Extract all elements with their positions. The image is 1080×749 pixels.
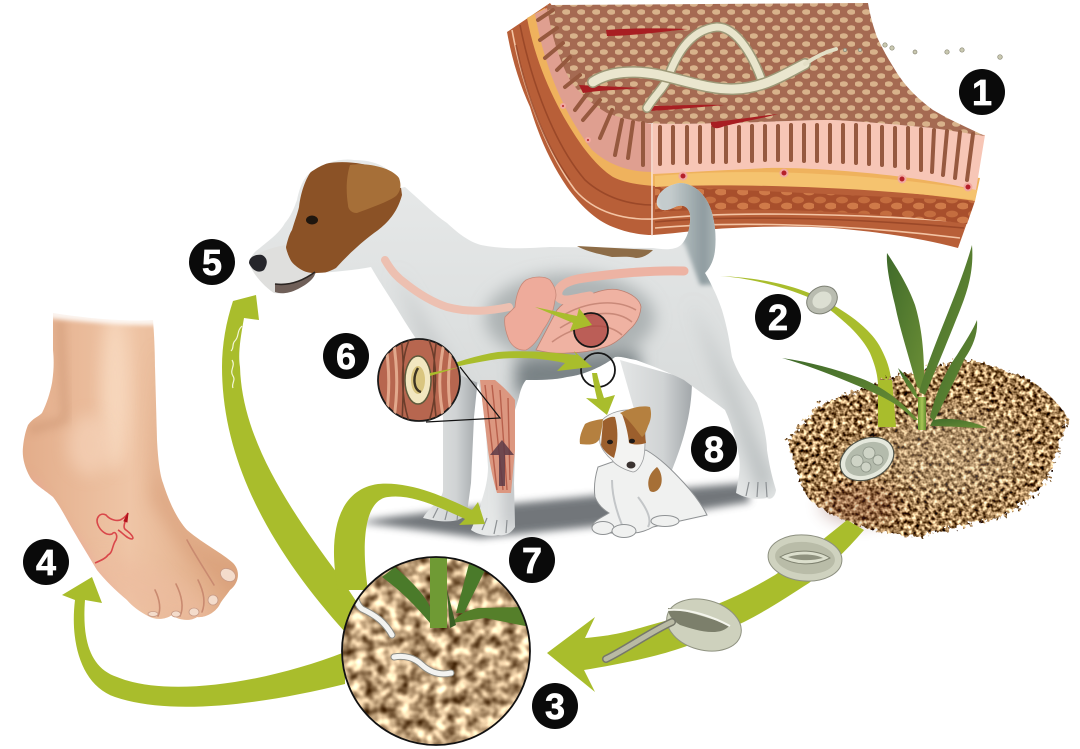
larva cyst <box>405 356 431 404</box>
bleeding spots <box>579 28 778 128</box>
badge 1: 1 <box>972 72 992 113</box>
toenails <box>148 566 238 617</box>
puppy body <box>592 450 707 533</box>
muscle circle <box>378 339 460 421</box>
head brown patch <box>286 162 402 273</box>
orange sub-layer <box>527 8 980 201</box>
larvae on arrow <box>231 326 242 388</box>
blood vessels <box>561 104 972 190</box>
icon: larva in egg <box>766 532 844 584</box>
stomach <box>505 277 556 350</box>
callout lines <box>426 367 500 422</box>
icon: egg in soil <box>833 429 901 489</box>
arrow: mammary to puppy <box>586 373 615 415</box>
section seam <box>651 124 653 236</box>
arrow: soil to step 3 <box>547 520 864 692</box>
lumen lining with cells <box>547 3 985 136</box>
badge 7: 7 <box>522 540 542 581</box>
inner arrow to intestine <box>535 307 592 331</box>
badge 7 <box>509 537 555 583</box>
arrow: step 3 to 4 <box>62 577 345 707</box>
ground shadow below dog <box>357 483 750 538</box>
mouth <box>275 272 315 293</box>
leg muscle <box>480 380 515 493</box>
panel: foot with skin lesion <box>22 313 238 620</box>
muzzle <box>250 248 306 292</box>
puppy side patch <box>648 467 662 492</box>
puppy head patches <box>601 417 617 458</box>
far paw detail and toes <box>433 482 767 534</box>
foot <box>22 313 238 620</box>
arrow: step 3 to 5 <box>222 295 362 632</box>
toes <box>155 540 214 616</box>
arrow tip entering soil <box>878 380 896 427</box>
panel: puppy <box>580 406 707 538</box>
arrow: muscle to mammary <box>430 351 592 374</box>
mammary ring <box>581 353 615 387</box>
larvae <box>354 587 451 674</box>
puppy head <box>600 410 645 472</box>
badge 3 <box>532 683 578 729</box>
plant <box>782 245 987 428</box>
badge 4 <box>23 539 69 585</box>
badge 2: 2 <box>768 297 788 338</box>
small intestine <box>536 271 684 353</box>
badge 5 <box>189 239 235 285</box>
puppy ears <box>620 406 651 437</box>
badge 1 <box>959 69 1005 115</box>
adult hookworm <box>593 27 836 108</box>
far hind leg <box>620 360 692 470</box>
badge 6: 6 <box>336 336 356 377</box>
soil mound <box>788 360 1067 537</box>
badge 4: 4 <box>36 542 56 583</box>
body shading <box>395 270 775 530</box>
nose <box>249 255 267 272</box>
soil tonal variation <box>880 410 1020 500</box>
larva migrans trail <box>95 513 133 563</box>
top fade of leg <box>46 302 160 325</box>
right villi layer <box>653 120 985 190</box>
badge 8 <box>691 426 737 472</box>
left villi layer <box>535 8 653 172</box>
eye <box>306 216 318 224</box>
badge 8: 8 <box>704 429 724 470</box>
icon: hatching larva <box>606 591 747 659</box>
panel: soil mound with plant <box>782 245 1067 537</box>
ear <box>347 164 400 213</box>
submucosal lumps <box>655 186 975 224</box>
villi crypts <box>538 10 973 180</box>
puppy paws <box>592 516 679 538</box>
tail shading <box>656 183 716 288</box>
badge 2 <box>755 294 801 340</box>
intestine magnifier ring <box>574 313 608 347</box>
puppy face <box>607 439 636 468</box>
arrow: step 1 to 2 <box>720 276 896 427</box>
icon: egg on surface <box>802 281 842 319</box>
panel: larva encysted in muscle <box>378 338 500 425</box>
eggs released <box>843 43 1002 59</box>
plant base <box>382 553 530 628</box>
far front leg <box>423 360 478 521</box>
arrow: step 3 to 7 <box>334 484 485 590</box>
panel: intestine cross-section <box>507 3 1002 248</box>
intestine wall outer muscle layer <box>507 3 975 248</box>
panel: magnified soil with larvae <box>342 553 530 745</box>
leg arrow <box>490 440 514 486</box>
plant stem <box>918 397 926 430</box>
esophagus <box>385 260 509 311</box>
badge 6 <box>323 333 369 379</box>
pale stripes in wall <box>512 30 966 238</box>
back brown patch <box>577 246 653 258</box>
badge 3: 3 <box>545 686 565 727</box>
dog body <box>240 150 785 545</box>
badge 5: 5 <box>202 242 222 283</box>
puppy shading <box>612 480 650 527</box>
panel: adult dog <box>240 150 785 545</box>
